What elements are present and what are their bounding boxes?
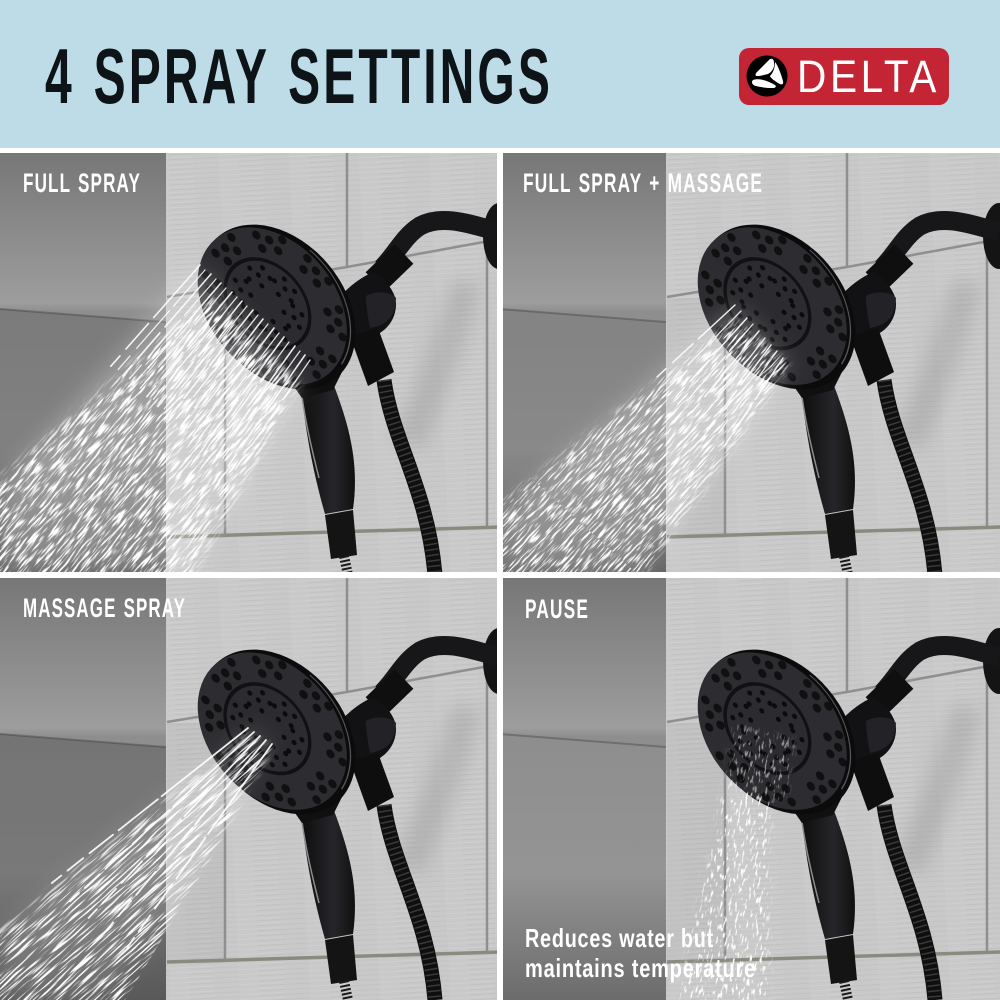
band shading <box>0 734 166 1000</box>
label: FULL SPRAY + MASSAGE <box>523 168 763 198</box>
shower scene <box>500 150 1000 575</box>
label: FULL SPRAY <box>23 168 141 198</box>
header band <box>0 0 1000 148</box>
spray: massage jets <box>0 725 280 1000</box>
title: 4 SPRAY SETTINGS <box>45 32 553 120</box>
label: MASSAGE SPRAY <box>23 593 186 623</box>
note <box>526 928 754 982</box>
shower scene <box>0 575 515 1000</box>
shower scene <box>0 150 515 575</box>
panel: full spray + massage <box>500 150 1000 575</box>
panel: full spray <box>0 150 515 575</box>
note: Reduces water but <box>525 923 714 953</box>
logo: Delta <box>739 48 949 105</box>
band shading <box>503 309 666 572</box>
panel: pause <box>500 575 1000 1000</box>
label: PAUSE <box>525 594 589 624</box>
panel: massage spray <box>0 575 515 1000</box>
icon: Delta emblem <box>746 56 788 96</box>
spray: trickle droplets <box>679 724 797 1000</box>
shower scene <box>500 575 1000 1000</box>
note: maintains temperature <box>525 953 756 983</box>
spray: combined fan <box>503 305 800 572</box>
spray: full fan <box>0 265 315 572</box>
band shading <box>0 309 166 572</box>
wordmark: DELTA <box>797 51 940 102</box>
